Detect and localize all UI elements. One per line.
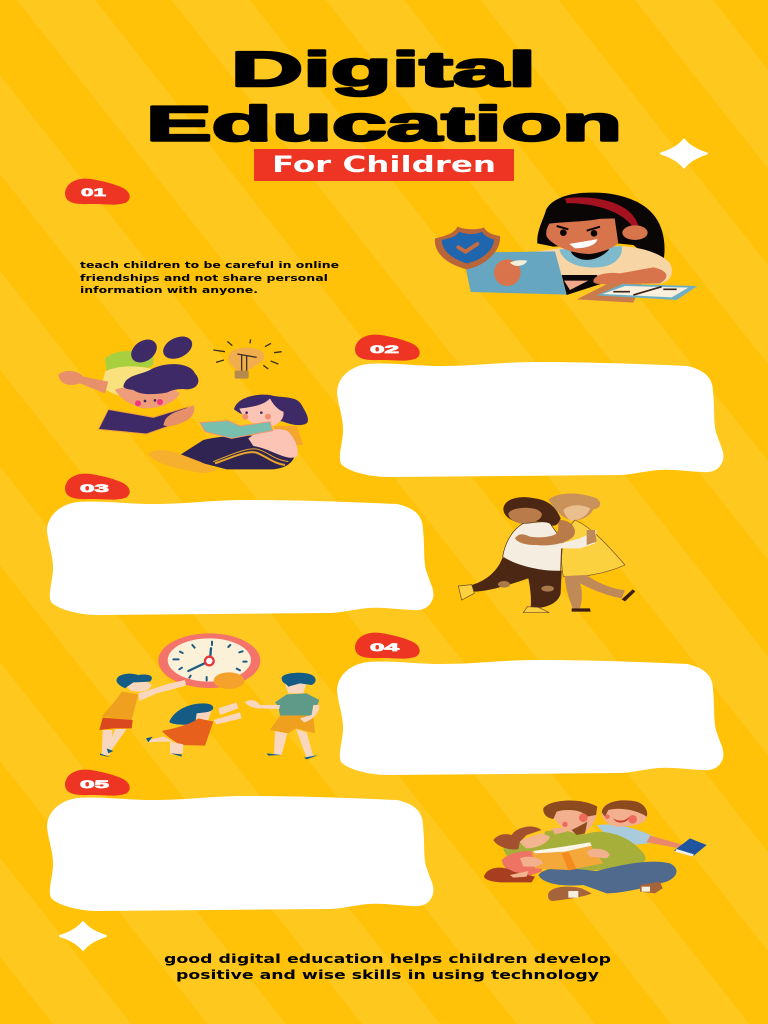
subtitle banner	[254, 149, 514, 181]
illustration: children and clock	[99, 633, 319, 759]
closing statement	[164, 951, 611, 982]
illustration: two children hugging	[458, 494, 635, 613]
illustration: father reading with two children	[484, 800, 707, 901]
title	[146, 43, 622, 152]
illustration: two girls reading with lightbulb	[58, 332, 308, 473]
text block 01	[80, 261, 339, 296]
panel: blank text blob 04	[337, 660, 723, 775]
badge 04	[355, 633, 420, 659]
badge 01	[65, 179, 130, 205]
badge 01: 01	[81, 187, 106, 199]
panel: blank text blob 02	[337, 362, 723, 477]
badge 02: 02	[370, 344, 399, 356]
title: Education	[146, 98, 622, 152]
badge 03: 03	[80, 483, 109, 495]
icon: white sparkle top	[661, 140, 707, 168]
subtitle banner: For Children	[272, 153, 496, 178]
text block 01: friendships and not share personal	[80, 274, 328, 284]
closing statement: good digital education helps children develop	[164, 951, 611, 966]
badge 04: 04	[370, 642, 401, 654]
title: Digital	[231, 43, 536, 97]
closing statement: positive and wise skills in using technology	[176, 967, 599, 982]
badge 05	[65, 770, 130, 796]
badge 03	[65, 474, 130, 500]
badge 05: 05	[80, 779, 109, 791]
panel: blank text blob 05	[47, 796, 433, 911]
text block 01: information with anyone.	[80, 286, 258, 296]
text block 01: teach children to be careful in online	[80, 261, 339, 271]
illustration: girl at laptop with shield	[435, 193, 697, 303]
icon: white sparkle bottom	[60, 922, 106, 950]
badge 02	[355, 335, 420, 361]
panel: blank text blob 03	[47, 500, 433, 615]
